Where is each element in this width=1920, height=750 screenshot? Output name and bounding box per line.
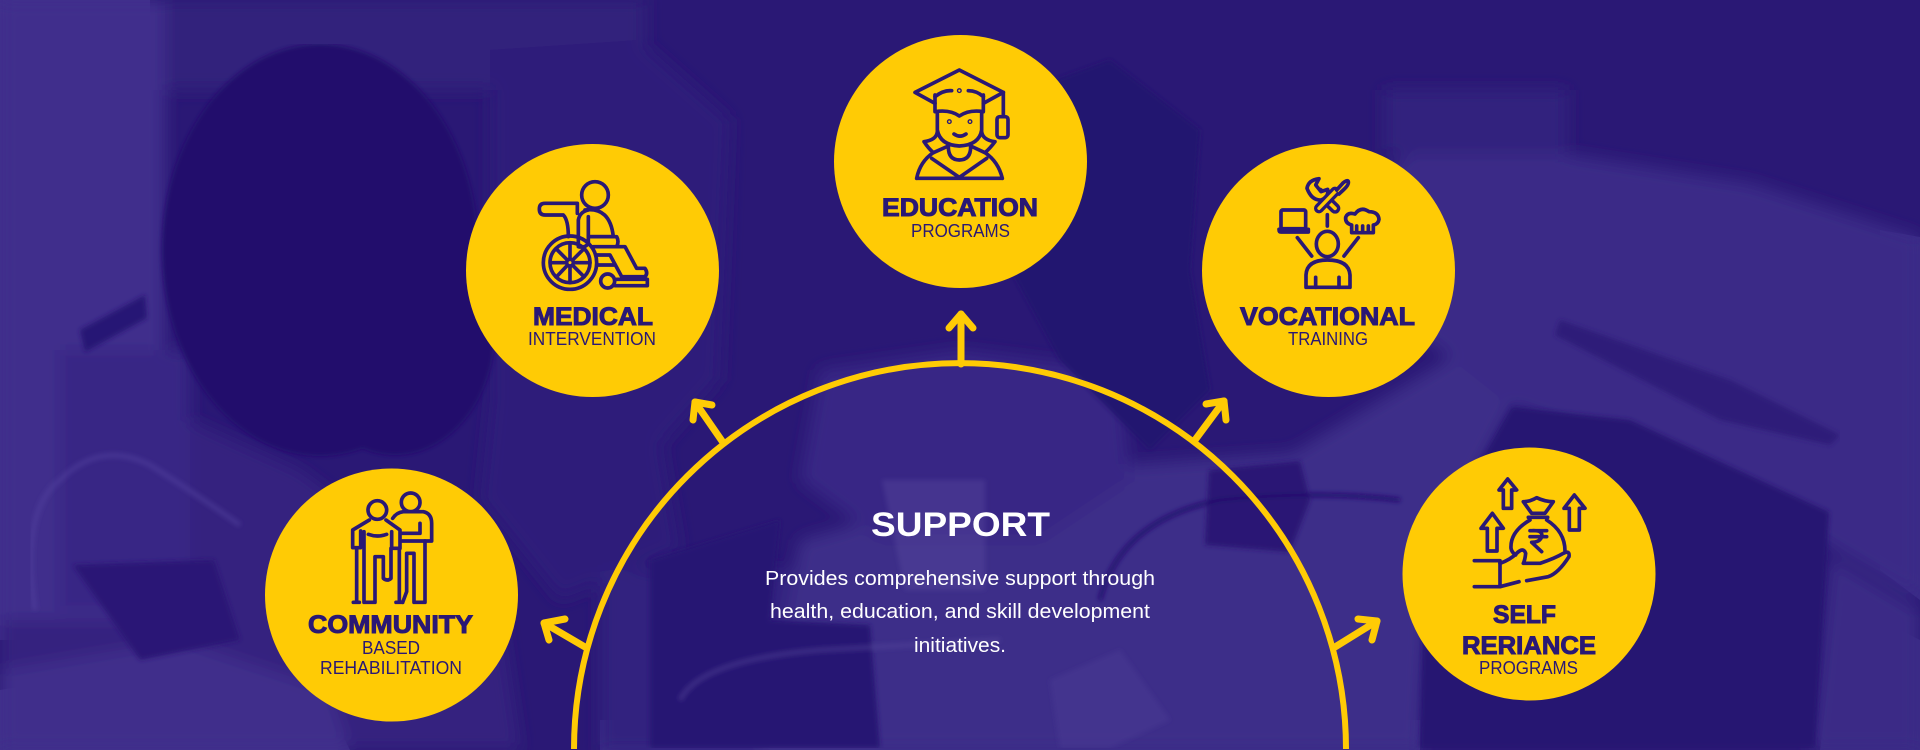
label: education: EDUCATION	[882, 194, 1038, 222]
support description: initiatives.	[914, 635, 1006, 657]
panel: self reliance programs	[1402, 448, 1656, 700]
arrow: to medical	[693, 402, 722, 441]
label: rehabilitation: REHABILITATION	[320, 658, 462, 678]
icon: wheelchair	[539, 182, 647, 289]
label: reriance: RERIANCE	[1462, 632, 1596, 660]
support description	[765, 568, 1155, 657]
label: programs: PROGRAMS	[1479, 658, 1578, 678]
icon: graduate	[915, 70, 1008, 178]
label: self: SELF	[1493, 601, 1556, 629]
panel: medical intervention	[466, 144, 719, 397]
arrow: to community	[544, 619, 585, 647]
arrow: to self reliance	[1335, 619, 1377, 647]
icon: skills person	[1279, 179, 1379, 287]
arrow: to vocational	[1195, 401, 1226, 440]
panel: community based rehabilitation	[265, 468, 518, 722]
label: intervention: INTERVENTION	[528, 329, 656, 349]
icon: carer and person on crutches	[353, 493, 432, 602]
support heading: SUPPORT	[871, 506, 1050, 544]
label: training: TRAINING	[1288, 329, 1368, 349]
arrow: to education	[949, 314, 973, 364]
label: programs: PROGRAMS	[911, 221, 1010, 241]
panel: vocational training	[1202, 144, 1455, 397]
label: vocational: VOCATIONAL	[1240, 303, 1415, 331]
central semicircle arc	[574, 363, 1346, 749]
support text block	[765, 506, 1155, 657]
label: medical: MEDICAL	[533, 303, 653, 331]
panel: education programs	[834, 35, 1087, 288]
label: community: COMMUNITY	[308, 611, 473, 639]
support description: Provides comprehensive support through	[765, 568, 1155, 590]
icon: hand holding money bag	[1474, 479, 1585, 587]
support description: health, education, and skill development	[770, 601, 1150, 623]
label: based: BASED	[362, 638, 420, 658]
